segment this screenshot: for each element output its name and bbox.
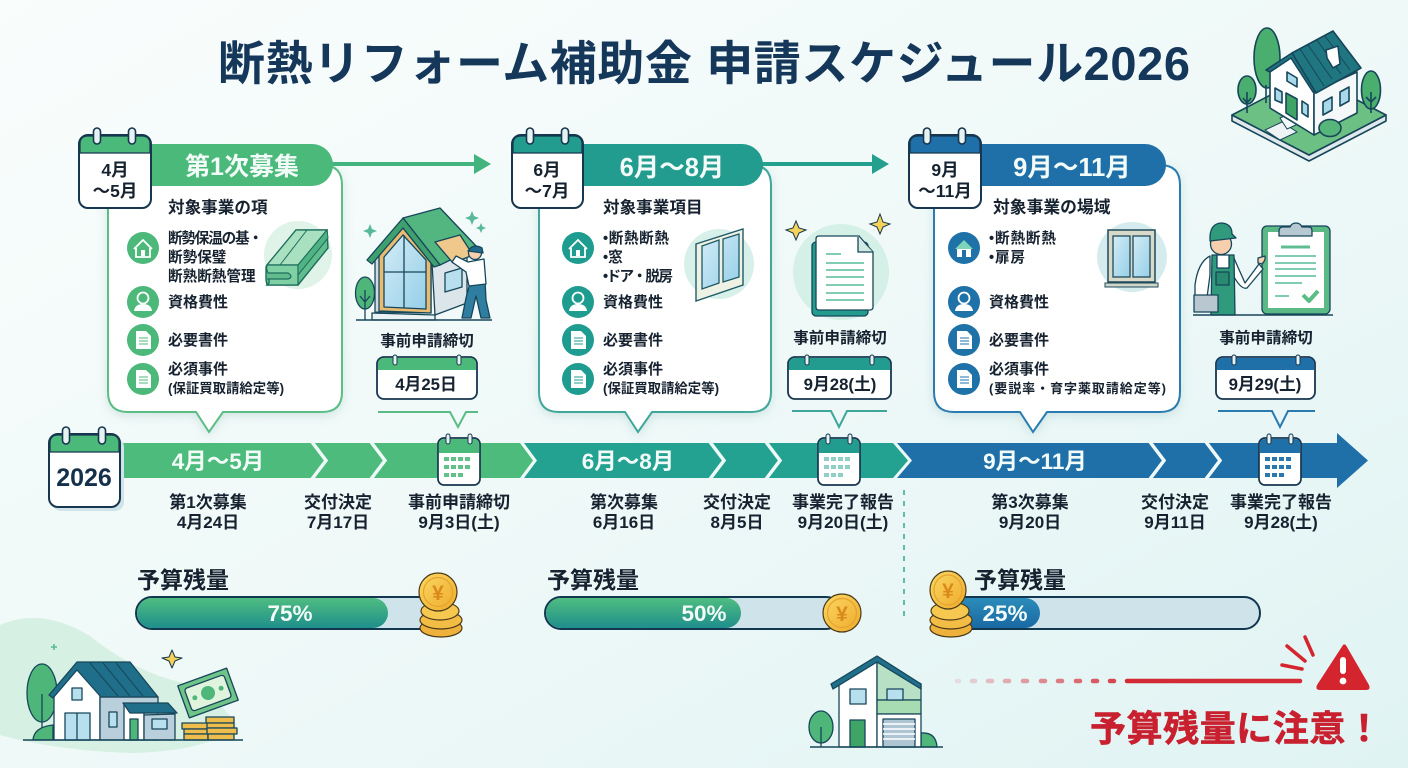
milestones: phase 3: 交付決定 [1141,493,1209,512]
icon: isometric house [1232,28,1386,161]
budget: 50 percent [545,567,861,632]
item: required documents [127,324,228,356]
item: qualification: 資格費性 [168,293,228,311]
item: mandatory conditions: 必須事件 [603,360,663,378]
calendar: deadline 3: 9月29(土) [1229,375,1301,394]
band label 1: 4月～5月 [172,449,264,474]
warning: dashed line [957,679,1300,683]
item: required documents: 必要書件 [603,331,663,349]
item: mandatory conditions: (要説率・育字薬取請給定等) [989,381,1166,396]
item: qualification [562,286,663,318]
icon: coin: ¥ [836,603,848,626]
header pill [150,144,333,186]
milestones: phase 1 [169,492,510,532]
section heading: 対象事業の項 [168,197,268,217]
milestones: phase 1: 7月17日 [307,513,369,532]
milestones: phase 2: 8月5日 [711,513,763,532]
budget: 25 percent: 25% [982,601,1028,626]
calendar icon: timeline 2 [818,434,860,485]
header text: 第1次募集 [185,153,299,181]
milestones: phase 1: 第1次募集 [169,492,247,512]
illustration: house with money [23,644,243,740]
segment: blue with arrowhead [897,433,1368,488]
panel: second recruitment [512,128,771,432]
item: target work: •窓 [603,248,623,266]
title: 断熱リフォーム補助金 申請スケジュール2026 [218,37,1190,90]
calendar: deadline 2: 9月28(土) [804,375,876,394]
calendar badge [79,128,151,208]
item: mandatory conditions: (保証買取請給定等) [168,380,284,396]
item: target work: 断勢保璧 [168,248,227,266]
callout body [108,165,342,432]
milestones: phase 3: 第3次募集 [991,492,1069,512]
calendar: deadline 2 [788,355,891,399]
pointer: deadline 2 [792,411,887,427]
callout body [539,165,771,432]
calendar badge: 9月 [931,160,959,180]
arrow: phase 2 to phase 3 [760,154,889,174]
section heading: 対象事業の場域 [993,197,1111,217]
milestones: phase 2: 事業完了報告 [792,493,894,512]
calendar: deadline 1 [377,355,477,399]
header text: 6月～8月 [620,154,724,182]
milestones: phase 1: 4月24日 [177,513,239,532]
milestones: phase 2: 6月16日 [593,513,655,532]
calendar badge: 4月 [101,160,129,180]
item: target work: 断勢保温の基・ [168,229,263,247]
illustration: worker with clipboard [1193,223,1333,315]
calendar: deadline 1: 4月25日 [395,375,457,394]
milestones: phase 3: 事業完了報告 [1230,493,1332,512]
icon: coin [823,594,861,632]
icon: coin stack [930,571,972,637]
pointer: deadline 3 [1218,411,1315,427]
illustration: document [786,214,890,320]
item: mandatory conditions: 必須事件 [989,360,1049,378]
item: target work: 断熟断熱管理 [168,267,256,285]
background hill [0,618,237,753]
item: target work [562,229,673,285]
callout body [934,165,1180,432]
milestones: phase 1: 事前申請締切 [408,492,510,512]
milestones: phase 3: 9月20日 [999,513,1061,532]
panel: first recruitment [79,128,342,432]
item: qualification: 資格費性 [989,293,1049,311]
icon: coin stack: ¥ [942,580,954,603]
pointer: deadline 1 [378,412,478,427]
milestones: phase 2 [590,492,894,532]
calendar badge [512,128,583,208]
milestones: phase 2: 交付決定 [703,493,771,512]
item: target work: •断熱断熱 [989,229,1056,247]
label: deadline 1: 事前申請締切 [380,331,474,350]
band label 2: 6月～8月 [582,449,674,474]
arrow: phase 1 to phase 2 [330,154,491,174]
calendar: year 2026: 2026 [56,464,112,492]
item: required documents: 必要書件 [168,331,228,349]
calendar badge [909,128,981,208]
timeline band [110,433,1368,488]
illustration: house insulation worker [356,208,492,320]
item: qualification: 資格費性 [603,293,663,311]
label: deadline 3: 事前申請締切 [1219,328,1313,347]
calendar icon: timeline 1 [438,434,480,485]
header pill [981,144,1166,186]
milestones: phase 3: 9月28(土) [1244,513,1318,532]
section heading: 対象事業項目 [603,197,703,217]
item: qualification [127,286,228,318]
milestones: phase 2: 9月20日(土) [798,513,888,532]
item: target work: •扉房 [989,249,1025,266]
item: mandatory conditions [127,360,284,396]
calendar: year 2026 [49,427,124,511]
item: mandatory conditions: (保証買取請給定等) [603,380,719,396]
item: target work: •断熱断熱 [603,229,669,247]
budget: 75 percent: 予算残量 [137,567,229,593]
budget: 50 percent: 予算残量 [547,567,639,593]
segment: green [110,443,533,478]
segment: teal [524,443,908,478]
calendar: deadline 3 [1216,355,1315,399]
item: qualification [948,286,1049,318]
panel: third recruitment [909,128,1180,432]
calendar badge: ～11月 [918,181,972,201]
budget: 25 percent: 予算残量 [974,567,1066,593]
calendar badge: 6月 [533,160,561,180]
budget: 50 percent: 50% [681,601,727,626]
warning text: 予算残量に注意！ [1090,708,1382,749]
icon: coin stack: ¥ [432,582,444,605]
icon: window [684,229,754,301]
icon: insulation roll [264,221,332,289]
item: mandatory conditions [562,360,719,396]
milestones: phase 1: 交付決定 [304,493,372,512]
calendar badge: ～7月 [525,181,569,201]
item: target work [948,229,1056,266]
icon: coin stack [419,573,462,637]
calendar icon: timeline 3 [1259,434,1301,485]
band label 3: 9月～11月 [983,449,1087,474]
milestones: phase 1: 9月3日(土) [418,513,500,532]
milestones: phase 3: 9月11日 [1144,513,1206,532]
budget: 25 percent [930,567,1260,637]
budget: 75 percent: 75% [267,601,313,626]
item: required documents [948,324,1049,356]
budget: 75 percent [136,567,462,637]
item: mandatory conditions: 必須事件 [168,360,228,378]
label: deadline 2: 事前申請締切 [793,328,887,347]
header pill [583,144,763,186]
item: target work: •ドア・脱房 [603,267,673,285]
item: target work [127,229,263,285]
item: mandatory conditions [948,360,1166,396]
calendar badge: ～5月 [93,181,137,201]
item: required documents [562,324,663,356]
milestones: phase 3 [991,492,1332,532]
icon: warning triangle [1282,637,1370,690]
milestones: phase 2: 第次募集 [590,492,658,512]
illustration: two-storey house [809,656,943,747]
item: required documents: 必要書件 [989,331,1049,349]
icon: window [1097,222,1167,292]
header text: 9月～11月 [1013,154,1131,182]
